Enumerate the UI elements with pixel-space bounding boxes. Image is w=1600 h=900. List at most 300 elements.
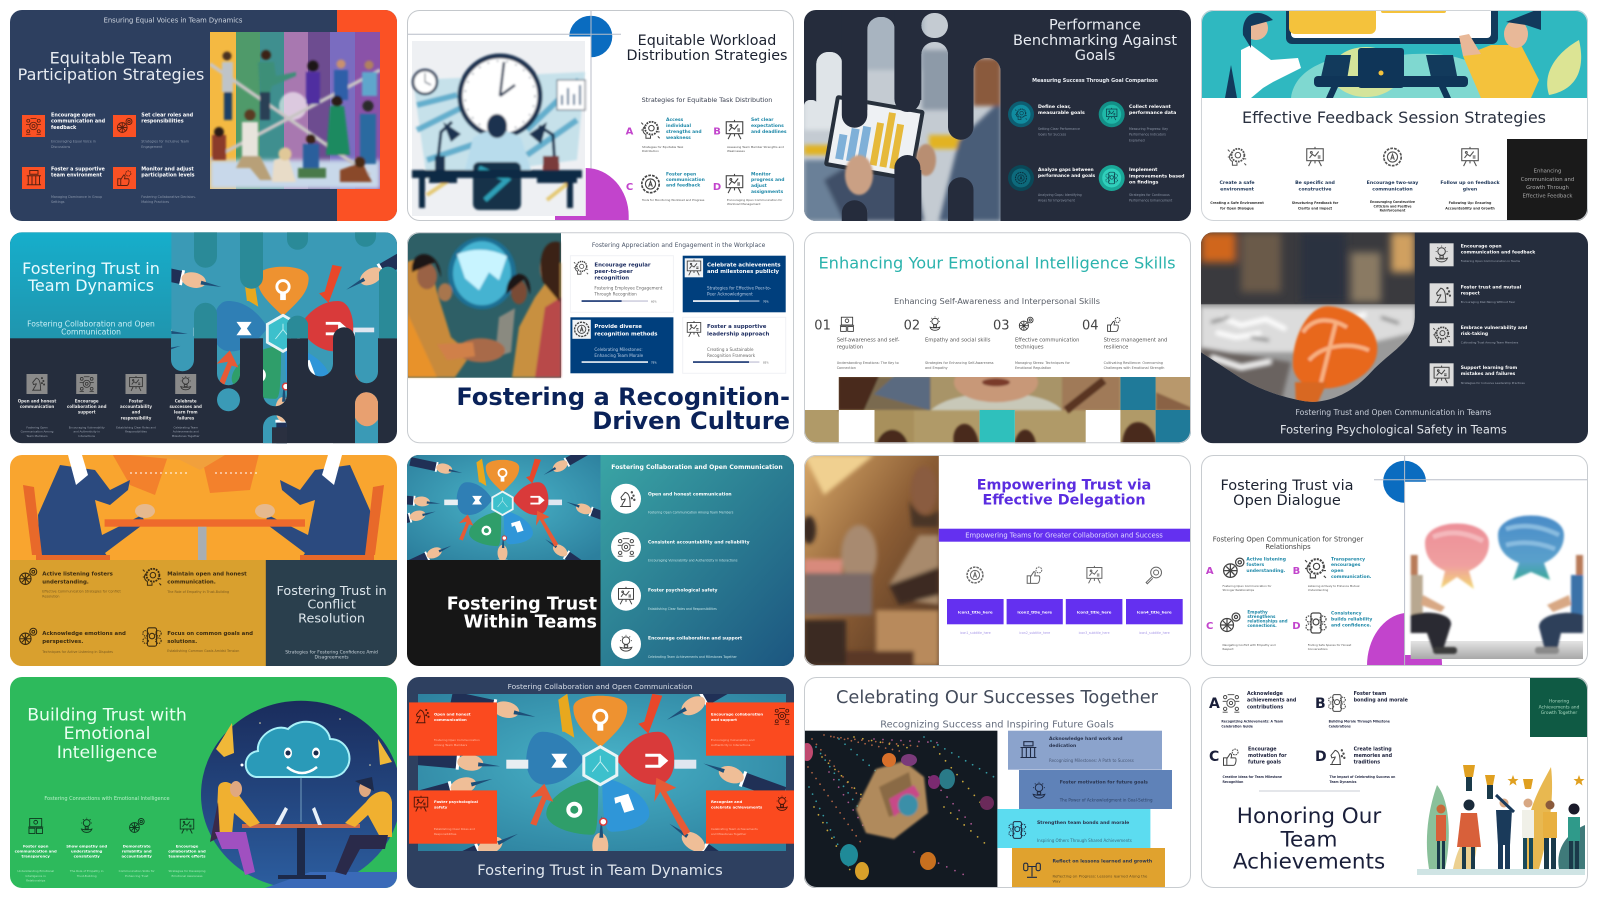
item D: traditions <box>1354 760 1380 766</box>
panel: Equitable Workload Distribution Strategies <box>407 10 794 221</box>
item: Foster a supportive team: Settings <box>51 200 65 204</box>
item A <box>1209 691 1297 728</box>
item 4: Achievements and <box>173 430 199 434</box>
side panel <box>600 455 794 666</box>
card: peer recognition: recognition <box>594 276 629 282</box>
item: Monitor and adjust: Monitor and adjust <box>141 166 194 172</box>
header band <box>10 232 171 338</box>
step 01: Understanding Emotions: The Key to <box>837 361 899 365</box>
panel: Performance Benchmarking Against Goals <box>804 10 1191 221</box>
item: specific and constructive <box>1292 147 1339 211</box>
box: open and honest: Fostering Open Communication <box>434 738 480 742</box>
item B <box>713 117 787 153</box>
item C: motivation for <box>1248 753 1287 759</box>
item D: Conversations <box>1308 647 1328 651</box>
item C: Foster open <box>666 172 696 178</box>
panel: Empowering Trust via Effective Delegation <box>802 455 1191 666</box>
item 2: support <box>78 410 96 415</box>
subtitle: Fostering Collaboration and Open <box>27 319 155 328</box>
item: Monitor and adjust: Fostering Collaborative Decision- <box>141 195 196 199</box>
item A: A <box>1209 696 1220 712</box>
item: open communication <box>1430 243 1536 266</box>
item D: assignments <box>751 189 783 195</box>
item D: Consistency <box>1331 612 1362 616</box>
item 1: Foster open <box>23 844 48 848</box>
card: diverse methods: Enhancing Team Morale <box>594 353 644 358</box>
item: vulnerability <box>1430 323 1527 346</box>
item: Define clear goals: Goals for Success <box>1038 133 1066 137</box>
item 4: Celebrating Team <box>173 425 198 429</box>
item B: Listening Actively to Enhance Mutual <box>1308 584 1359 588</box>
item: Set clear roles: Engagement <box>141 145 163 149</box>
item 1 <box>18 374 56 438</box>
item C: Empathy <box>1247 610 1268 614</box>
title: Honoring Our <box>1237 804 1381 829</box>
callout: black box: Communication and <box>1521 177 1574 183</box>
panel: Fostering Psychological Safety in Teams <box>1201 232 1588 443</box>
item C: C <box>1209 749 1219 765</box>
panel: Building Trust with Emotional Intelligence <box>10 677 401 889</box>
item 3: icon3_subtitle_here <box>1079 631 1110 635</box>
item A: A <box>626 126 634 138</box>
item 2: The Role of Empathy in <box>70 869 104 873</box>
callout: black box: Enhancing <box>1534 168 1561 174</box>
item 1: Open and honest communication <box>648 491 732 497</box>
card: celebrate publicly <box>683 256 786 312</box>
card: supportive leadership: Foster a supportive <box>707 324 766 330</box>
item: active listening <box>20 568 121 598</box>
card: diverse methods <box>570 317 673 373</box>
image: man handing gift boxes in warm light <box>802 455 939 666</box>
title: Within Teams <box>464 612 597 632</box>
image: person at desk before large clock <box>412 41 585 216</box>
item 1 <box>611 484 734 514</box>
item D: D <box>1315 749 1327 765</box>
item 4: collaboration and <box>168 848 206 854</box>
title: Enhancing Your Emotional Intelligence Skills <box>818 253 1176 272</box>
item: Set clear roles: Set clear roles and <box>141 112 193 118</box>
item: active listening: Active listening fosters <box>42 571 113 577</box>
step 02: Empathy and social skills <box>925 337 991 343</box>
item B: Set clear <box>751 118 774 123</box>
item B: Building Morale Through Milestone <box>1329 720 1390 724</box>
item: two-way communication: Encouraging Constructive <box>1370 200 1415 204</box>
item D: Encouraging Open Communication for <box>727 198 782 202</box>
step 02: and Empathy <box>925 366 948 370</box>
item 4: Strategies for Developing <box>169 869 205 873</box>
heading: Fostering Collaboration and Open Communication <box>508 682 693 691</box>
item: Analyze gaps <box>1008 165 1096 203</box>
item: learning from mistakes: mistakes and failures <box>1461 371 1516 377</box>
item: Monitor and adjust <box>113 166 197 204</box>
item 1: Understanding Emotional <box>17 869 54 873</box>
image: two people talking with watercolor speech bubbles <box>1411 516 1583 659</box>
item 1 <box>15 818 57 883</box>
title: Fostering Trust in Team Dynamics <box>477 862 723 879</box>
item: Collect performance data: performance data <box>1129 110 1176 116</box>
image: two people with smiling cloud <box>201 701 401 889</box>
item D: progress and <box>751 177 784 183</box>
image: hands around flower seen through pill windows <box>171 232 397 444</box>
card: supportive leadership: Recognition Framework <box>707 353 756 358</box>
image: hands around flower <box>383 444 618 588</box>
item B: expectations <box>751 123 784 129</box>
item 3: Establishing Clear Roles and Responsibilities <box>648 607 717 611</box>
item: Foster a supportive team: Foster a supportive <box>51 166 105 172</box>
subtitle: Relationships <box>1265 543 1311 551</box>
step 03: 03 <box>993 318 1010 333</box>
title: Fostering Trust <box>447 594 597 614</box>
item B: Assessing Team Member Strengths and <box>727 145 784 149</box>
panel: Honoring Our Team Achievements <box>1201 677 1588 888</box>
step 04 <box>1082 318 1167 370</box>
card: diverse methods: Celebrating Milestones: <box>594 347 643 352</box>
item 2 <box>66 818 107 878</box>
card: diverse methods: Provide diverse <box>594 324 642 330</box>
item A: contributions <box>1247 704 1283 710</box>
item 3: Foster <box>129 398 143 403</box>
item: Monitor and adjust: Making Practices <box>141 200 169 204</box>
item: follow up: Accountability and Growth <box>1445 207 1495 211</box>
item D: Finding Safe Spaces for Honest <box>1308 643 1351 647</box>
step 02: 02 <box>904 318 920 333</box>
item 4: teamwork efforts <box>169 854 206 858</box>
item: vulnerability: risk-taking <box>1461 331 1488 337</box>
item: vulnerability: Cultivating Trust Among Team Members <box>1461 340 1519 344</box>
step 04: resilience <box>1104 344 1128 350</box>
item: open communication: communication. <box>167 579 216 585</box>
step: reflect: Way <box>1052 878 1061 884</box>
item 4: Celebrating Team Achievements and Milestones Together <box>648 655 737 659</box>
item 2 <box>1007 567 1063 635</box>
step 04: Cultivating Resilience: Overcoming <box>1104 361 1163 365</box>
item 4: icon4_title_here <box>1137 609 1172 614</box>
item: common goals: Focus on common goals and <box>167 631 253 637</box>
card: celebrate publicly: 70% <box>763 299 769 303</box>
image: diverse team on striped wall <box>210 32 380 189</box>
card: peer recognition <box>570 256 673 312</box>
item 3: Foster psychological safety <box>648 587 718 593</box>
title: Benchmarking Against <box>1013 33 1177 49</box>
item 3: accountability <box>122 854 152 858</box>
step: team bonds: Strengthen team bonds and morale <box>1037 820 1129 826</box>
item: safe environment: for Open Dialogue <box>1220 207 1255 211</box>
panel: Fostering Trust in Team Dynamics (navy and red) <box>407 671 794 900</box>
step 03 <box>993 317 1079 370</box>
title: Empowering Trust via <box>977 477 1151 493</box>
card: celebrate publicly: and milestones publicly <box>707 269 780 275</box>
title: Celebrating Our Successes Together <box>836 687 1159 708</box>
card: supportive leadership: Creating a Sustainable <box>707 347 753 352</box>
item: trust and respect: Foster trust and mutual <box>1461 285 1521 290</box>
step 04: 04 <box>1082 318 1099 333</box>
step 04: Stress management and <box>1104 337 1167 343</box>
item 1: Team Members <box>25 434 48 438</box>
item: Collect performance data: Performance Indicators <box>1129 133 1166 137</box>
item 3: Communication Skills for <box>119 869 155 873</box>
panel: Fostering Trust in Team Dynamics (teal) <box>10 232 397 444</box>
box: encourage collaboration: Encourage collaboration <box>711 712 763 716</box>
step: foster motivation: Foster motivation for future goals <box>1060 779 1148 785</box>
item: Monitor and adjust: participation levels <box>141 173 195 179</box>
box: psychological safety: Responsibilities <box>434 832 457 836</box>
title block: Strategies for Fostering Confidence Amid <box>285 650 378 656</box>
step 03: Emotional Regulation <box>1015 366 1051 370</box>
item A: fosters <box>1246 562 1265 568</box>
image: tablet chart seen through pill windows <box>804 13 1000 221</box>
item: Set clear roles: responsibilities <box>141 119 184 125</box>
title: Fostering Trust via <box>1220 478 1354 494</box>
item: Implement improvements <box>1099 165 1185 203</box>
item: acknowledge emotions: perspectives. <box>42 639 83 645</box>
title: Team Dynamics <box>27 276 154 295</box>
item: Define clear goals <box>1008 101 1085 137</box>
item 4 <box>170 374 202 438</box>
step: reflect <box>1012 848 1165 888</box>
step 01: regulation <box>837 344 863 350</box>
title: Fostering Psychological Safety in Teams <box>1280 422 1507 436</box>
step 02: Strategies for Enhancing Self-Awareness <box>925 361 994 365</box>
item 4: Milestones Together <box>172 434 201 438</box>
panel: Fostering Trust in Conflict Resolution <box>10 450 397 666</box>
step 01: 01 <box>814 318 831 333</box>
item: trust and respect: respect <box>1461 290 1481 296</box>
item 3: Responsibilities <box>125 430 147 434</box>
item: acknowledge emotions <box>20 628 126 654</box>
title: Effective Delegation <box>982 492 1146 508</box>
callout: black box <box>1507 139 1588 221</box>
item 2: Encouraging Vulnerability <box>69 425 105 429</box>
item 1: Relationships <box>26 879 46 883</box>
item: Foster a supportive team <box>22 166 106 204</box>
item 1: communication <box>20 404 54 409</box>
item: learning from mistakes <box>1430 363 1525 386</box>
image: team raising trophies <box>1417 765 1585 875</box>
title block: Disagreements <box>315 654 349 660</box>
item 2: Show empathy and <box>66 844 107 848</box>
item: Foster a supportive team: Managing Dominance in Group <box>51 195 102 199</box>
panel: Equitable Team Participation Strategies <box>10 10 397 221</box>
item A: strengths and <box>666 129 702 135</box>
item: open communication: Maintain open and honest <box>167 571 247 577</box>
item 4 <box>611 629 743 659</box>
item: Collect performance data: Explained <box>1129 138 1145 142</box>
item: Encourage open communication: Discussions <box>51 145 71 149</box>
item: Define clear goals: Setting Clear Performance <box>1038 127 1080 131</box>
subtitle band <box>939 529 1191 542</box>
box: open and honest: Open and honest <box>434 712 471 716</box>
item 4: Celebrate <box>175 398 197 403</box>
item B <box>1293 556 1372 592</box>
item: trust and respect: Encouraging Risk-Taking Without Fear <box>1461 300 1516 304</box>
item 2: and Authenticity in <box>73 430 100 434</box>
item C: C <box>1206 621 1213 632</box>
item: common goals <box>143 628 253 653</box>
item 3 <box>119 818 156 878</box>
box: open and honest <box>409 702 497 756</box>
step: team bonds <box>997 809 1150 848</box>
item D: Team Dynamics <box>1330 780 1357 784</box>
item 2: icon2_subtitle_here <box>1019 631 1050 635</box>
title: Goals <box>1075 48 1115 64</box>
item: safe environment: Create a safe <box>1219 181 1255 186</box>
item: vulnerability: Embrace vulnerability and <box>1461 326 1527 331</box>
box: open and honest: Among Team Members <box>434 743 468 747</box>
callout: green box <box>1530 677 1588 737</box>
item D <box>1315 746 1395 784</box>
subtitle: Fostering Trust and Open Communication in Teams <box>1295 408 1491 417</box>
item: Implement improvements: Strategies for Continuous <box>1129 193 1170 197</box>
step 01: Self-awareness and self- <box>837 337 900 343</box>
item: Collect performance data <box>1099 101 1176 142</box>
subtitle: Fostering Connections with Emotional Intelligence <box>44 796 170 802</box>
item 2: Trust-Building <box>76 874 97 878</box>
title block <box>266 560 397 666</box>
item D: Monitor <box>751 172 771 178</box>
item 1: Fostering Open Communication Among Team Members <box>648 510 734 514</box>
item C: Creative Ideas for Team Milestone <box>1222 775 1282 779</box>
box: psychological safety: Foster psychological <box>434 799 478 804</box>
item D: Create lasting <box>1354 747 1392 752</box>
item 2: collaboration and <box>67 404 107 409</box>
item 1: Intelligence in <box>26 874 46 878</box>
image: hands around flower <box>407 671 787 900</box>
item A: A <box>1206 566 1214 577</box>
step 01: Connection <box>837 366 856 370</box>
item: specific and constructive: Be specific and <box>1295 181 1335 186</box>
item A: Distribution <box>642 149 659 153</box>
item 3: responsibility <box>121 415 152 420</box>
item B <box>1315 691 1409 728</box>
step 03: Managing Stress: Techniques for <box>1015 361 1070 365</box>
step 01 <box>814 317 900 370</box>
item 2: icon2_title_here <box>1017 609 1052 614</box>
item A: weakness <box>666 135 691 141</box>
item 3 <box>116 374 156 434</box>
panel: Enhancing Your Emotional Intelligence Skills <box>804 232 1192 444</box>
item C: communication <box>666 177 705 183</box>
title: Participation Strategies <box>18 65 204 84</box>
item A: Stronger Relationships <box>1222 588 1255 592</box>
title: Achievements <box>1233 850 1385 875</box>
title: Team <box>1280 827 1337 852</box>
item B: Foster team <box>1354 692 1386 697</box>
item 3: Establishing Clear Roles and <box>116 425 156 429</box>
step: team bonds: Inspiring Others Through Shared Achievements <box>1037 838 1132 843</box>
item: common goals: solutions. <box>167 639 197 645</box>
item 2 <box>67 374 107 438</box>
card: diverse methods: 75% <box>651 360 657 364</box>
item: learning from mistakes: Strategies for Inclusive Leadership Practices <box>1461 381 1525 385</box>
item B: and deadlines <box>751 129 787 135</box>
title: Equitable Team <box>50 48 172 67</box>
item 3 <box>1066 566 1122 635</box>
item 3: Demonstrate <box>123 844 151 848</box>
heading: Fostering Appreciation and Engagement in the Workplace <box>592 242 766 249</box>
item: Analyze gaps: performance and goals <box>1038 173 1096 179</box>
title: Distribution Strategies <box>627 48 787 64</box>
item: follow up: given <box>1463 186 1477 192</box>
subtitle: Fostering Open Communication for Stronger <box>1213 536 1363 544</box>
box: recognize achievements: and Milestones Together <box>711 832 747 836</box>
item 2: Consistent accountability and reliability <box>648 539 750 545</box>
card: peer recognition: 60% <box>651 299 657 303</box>
box: recognize achievements: celebrate achievements <box>711 804 763 810</box>
card: celebrate publicly: Celebrate achievements <box>707 262 781 268</box>
item 4: icon4_subtitle_here <box>1139 631 1170 635</box>
item: Implement improvements: Performance Enhancement <box>1129 199 1173 203</box>
title: Building Trust with <box>27 705 187 725</box>
item: Analyze gaps: Analyzing Gaps: Identifying <box>1038 193 1082 197</box>
subtitle: Measuring Success Through Goal Comparison <box>1032 78 1158 84</box>
item 3: and <box>132 410 140 415</box>
item B: B <box>1293 566 1300 577</box>
image: orange cushion in curved frame <box>1201 232 1415 404</box>
card: supportive leadership: 85% <box>763 360 769 364</box>
step: acknowledge hard work: Recognizing Milestones: A Path to Success <box>1049 758 1134 763</box>
item D <box>1292 610 1372 651</box>
image mosaic of faces <box>804 362 1192 444</box>
item A: Celebration Guide <box>1221 724 1253 728</box>
panel: Fostering a Recognition-Driven Culture <box>407 232 794 443</box>
step: reflect: Reflecting on Progress: Lessons learned Along the <box>1052 874 1147 878</box>
item 2: consistently <box>74 854 100 858</box>
item D: D <box>1292 621 1301 632</box>
card: peer recognition: Encourage regular <box>594 262 651 268</box>
item 1: Open and honest <box>18 398 56 403</box>
item B: B <box>713 126 721 138</box>
item 3: reliability and <box>122 848 152 854</box>
item C: future goals <box>1248 760 1281 766</box>
item C: relationships and <box>1247 618 1288 624</box>
item B: encourages <box>1331 562 1361 568</box>
item 2: Encouraging Vulnerability and Authenticity in Interactions <box>648 558 738 562</box>
card: peer recognition: Through Recognition <box>593 292 637 296</box>
title: Emotional <box>64 724 150 744</box>
item: Implement improvements: Implement <box>1129 168 1157 173</box>
item D: The Impact of Celebrating Success on <box>1330 775 1395 779</box>
item: two-way communication <box>1367 148 1418 213</box>
title: Fostering Trust in <box>22 259 160 278</box>
box: encourage collaboration: Encouraging Vulnerability and <box>711 738 754 742</box>
item 2: Interactions <box>78 434 96 438</box>
item B: Weaknesses <box>727 149 745 153</box>
item 4 <box>168 818 206 878</box>
title: Driven Culture <box>592 407 790 435</box>
box: recognize achievements: Celebrating Team Achievements <box>711 827 758 831</box>
item A: individual <box>666 123 691 129</box>
item C: Recognition <box>1222 780 1243 784</box>
item A <box>1206 556 1286 592</box>
callout: black box: Effective Feedback <box>1522 194 1573 200</box>
item: active listening: understanding. <box>42 579 89 585</box>
item B: open <box>1331 569 1344 574</box>
box: encourage collaboration <box>706 702 794 756</box>
item: active listening: Resolution <box>42 594 60 598</box>
item: acknowledge emotions: Techniques for Active Listening in Disputes <box>41 650 113 654</box>
item C: and feedback <box>666 183 701 189</box>
image: people shaking hands under a glowing globe <box>407 232 561 378</box>
step 03: techniques <box>1015 344 1044 350</box>
item A: Fostering Open Communication for <box>1222 584 1272 588</box>
item 1: icon1_title_here <box>958 609 993 614</box>
subtitle: Communication <box>61 328 121 337</box>
item B: Transparency <box>1331 558 1365 562</box>
step 04: Challenges with Emotional Strength <box>1104 366 1164 370</box>
item 3: Enhancing Trust <box>125 874 149 878</box>
item: learning from mistakes: Support learning from <box>1461 366 1517 371</box>
item 3: icon3_title_here <box>1077 609 1112 614</box>
